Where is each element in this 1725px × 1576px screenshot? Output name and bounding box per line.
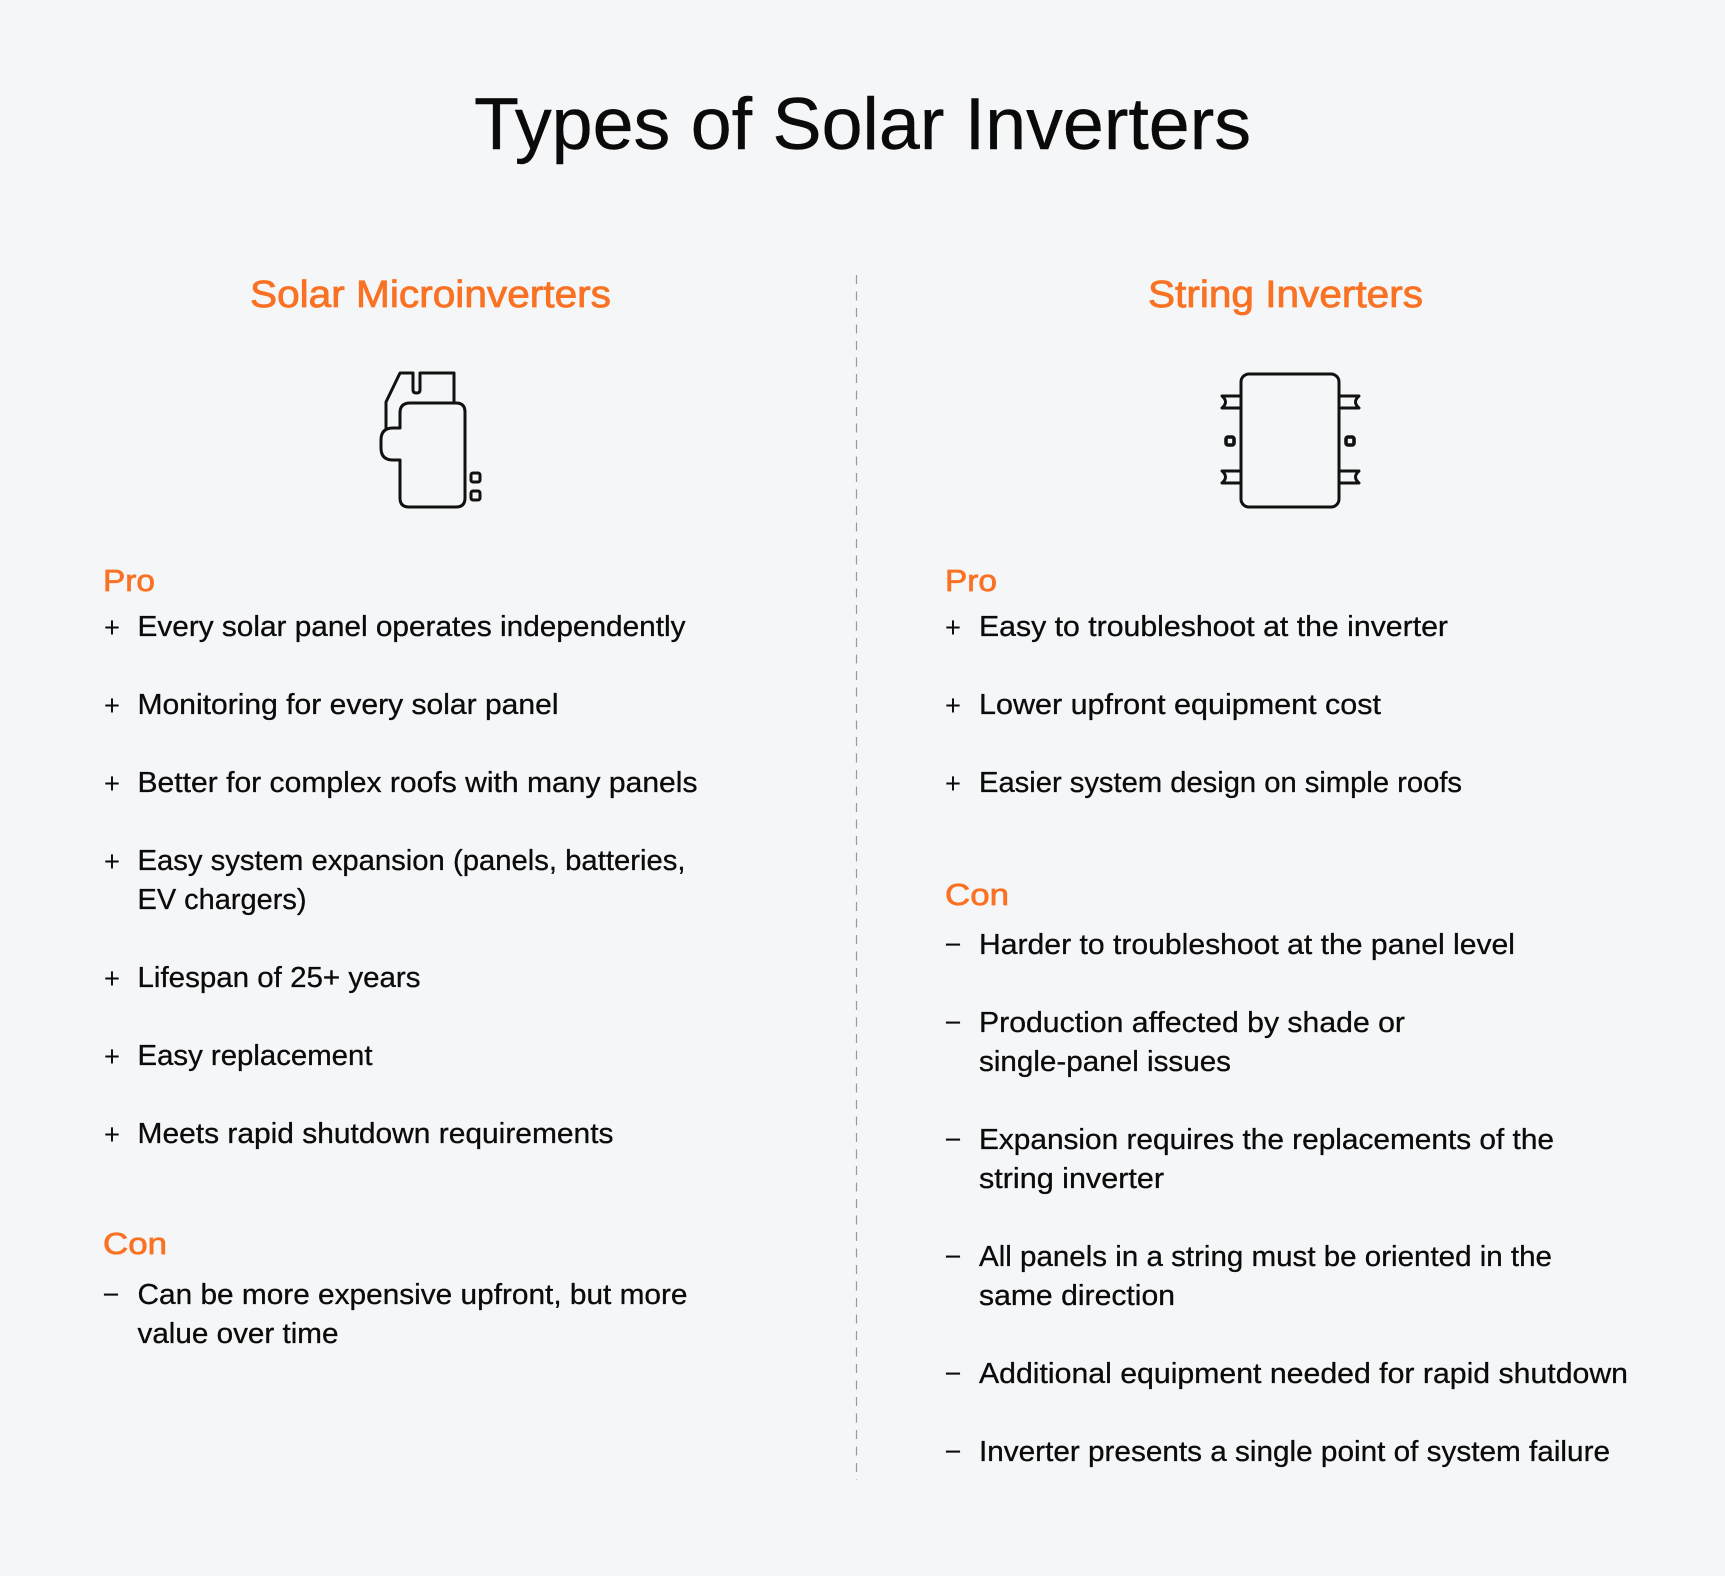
pro list: microinverters: + bbox=[104, 846, 120, 878]
pro list: microinverters: + bbox=[104, 690, 120, 722]
con list: string inverters: Additional equipment needed for rapid shutdown bbox=[979, 1358, 1628, 1390]
con list: string inverters: All panels in a string must be oriented in the bbox=[979, 1241, 1552, 1273]
pro list: string inverters: Pro bbox=[945, 563, 997, 598]
con list: string inverters: – bbox=[946, 1239, 961, 1271]
pro list: microinverters: + bbox=[104, 963, 120, 995]
pro list: microinverters: + bbox=[104, 1119, 120, 1151]
pro list: microinverters: Easy system expansion (panels, batteries, bbox=[138, 845, 686, 877]
con list: string inverters: – bbox=[946, 1005, 961, 1037]
pro list: string inverters: Lower upfront equipment cost bbox=[979, 689, 1381, 721]
con list: string inverters bbox=[945, 877, 1628, 1468]
pro list: microinverters: Meets rapid shutdown requirements bbox=[138, 1118, 614, 1150]
pro list: microinverters: Better for complex roofs with many panels bbox=[138, 767, 698, 799]
pro list: microinverters: Lifespan of 25+ years bbox=[138, 962, 420, 994]
pro list: string inverters: Easy to troubleshoot at the inverter bbox=[979, 611, 1448, 643]
pro list: string inverters: + bbox=[945, 690, 961, 722]
con list: string inverters: Inverter presents a single point of system failure bbox=[979, 1436, 1610, 1468]
pro list: microinverters: Every solar panel operates independently bbox=[138, 611, 686, 643]
pro list: microinverters: + bbox=[104, 612, 120, 644]
pro list: microinverters bbox=[103, 563, 698, 1151]
heading: string inverters: String Inverters bbox=[1148, 274, 1423, 316]
con list: microinverters: Con bbox=[103, 1226, 167, 1261]
con list: string inverters: string inverter bbox=[979, 1163, 1164, 1195]
title: Types of Solar Inverters bbox=[474, 84, 1251, 165]
con list: string inverters: – bbox=[946, 1356, 961, 1388]
con list: string inverters: single-panel issues bbox=[979, 1046, 1231, 1078]
panel: string inverters bbox=[945, 274, 1628, 1468]
pro list: string inverters: + bbox=[945, 768, 961, 800]
con list: string inverters: – bbox=[946, 1122, 961, 1154]
icon: microinverter bbox=[381, 373, 480, 507]
icon: string inverter bbox=[1222, 374, 1359, 507]
con list: string inverters: – bbox=[946, 927, 961, 959]
pro list: string inverters bbox=[945, 563, 1462, 800]
pro list: microinverters: Pro bbox=[103, 563, 155, 598]
panel: solar microinverters bbox=[103, 274, 698, 1350]
con list: string inverters: Con bbox=[945, 877, 1009, 912]
con list: microinverters bbox=[103, 1226, 688, 1350]
con list: microinverters: – bbox=[104, 1277, 119, 1309]
con list: string inverters: Harder to troubleshoot at the panel level bbox=[979, 929, 1515, 961]
con list: microinverters: value over time bbox=[138, 1318, 338, 1350]
con list: string inverters: Expansion requires the replacements of the bbox=[979, 1124, 1554, 1156]
pro list: string inverters: Easier system design on simple roofs bbox=[979, 767, 1462, 799]
pro list: microinverters: EV chargers) bbox=[138, 884, 306, 916]
con list: microinverters: Can be more expensive upfront, but more bbox=[138, 1279, 688, 1311]
con list: string inverters: Production affected by shade or bbox=[979, 1007, 1405, 1039]
con list: string inverters: same direction bbox=[979, 1280, 1175, 1312]
pro list: microinverters: + bbox=[104, 768, 120, 800]
pro list: microinverters: Monitoring for every solar panel bbox=[138, 689, 558, 721]
heading: solar microinverters: Solar Microinverters bbox=[250, 274, 611, 316]
pro list: microinverters: Easy replacement bbox=[138, 1040, 372, 1072]
con list: string inverters: – bbox=[946, 1434, 961, 1466]
pro list: microinverters: + bbox=[104, 1041, 120, 1073]
pro list: string inverters: + bbox=[945, 612, 961, 644]
